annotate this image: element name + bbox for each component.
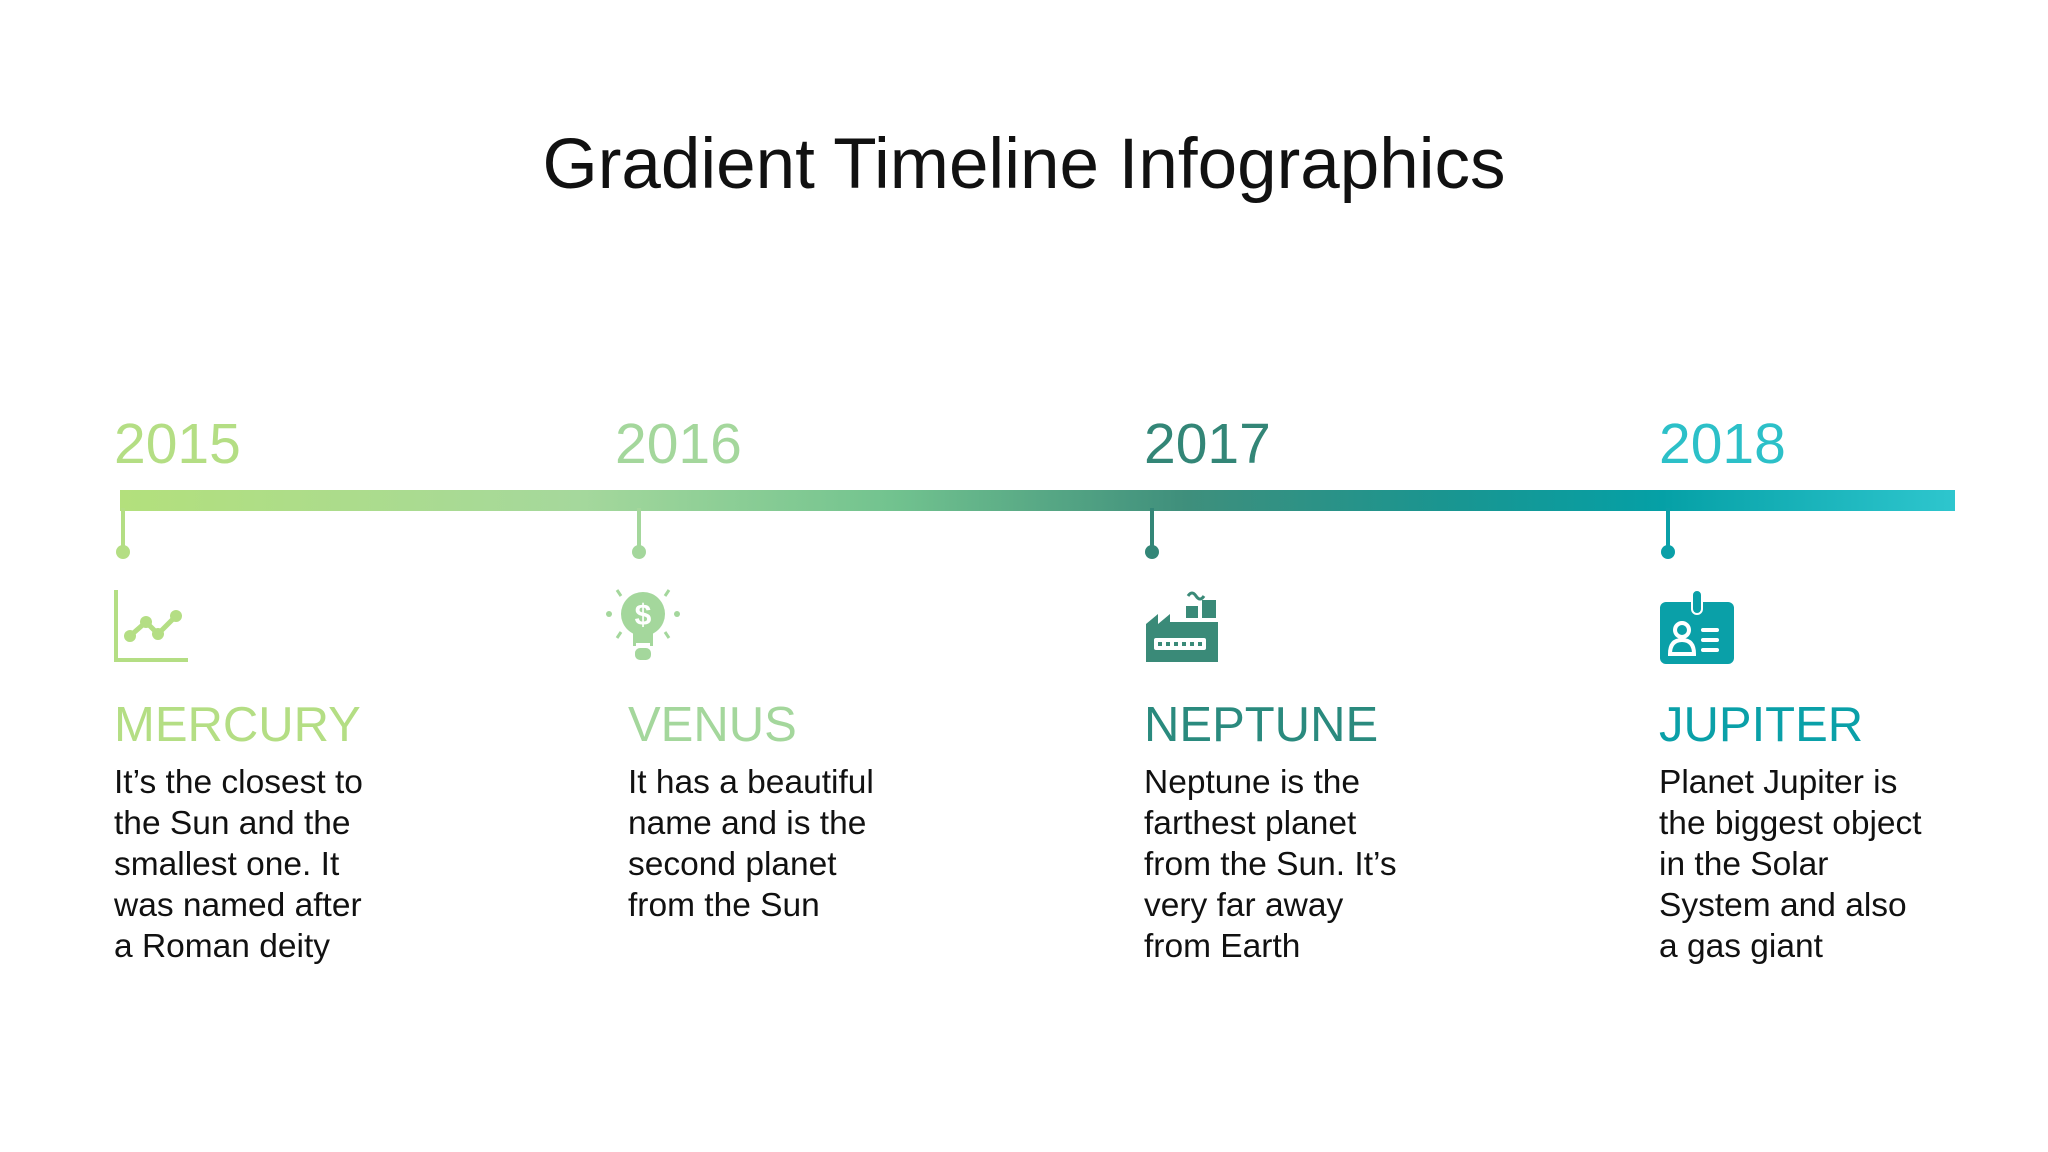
item: 2017 neptune bbox=[1144, 412, 1397, 965]
icon: line chart bbox=[114, 590, 188, 662]
description bbox=[1144, 764, 1397, 965]
name: VENUS bbox=[628, 698, 797, 752]
description: very far away bbox=[1144, 887, 1343, 924]
stem bbox=[1666, 508, 1670, 548]
icon: factory bbox=[1146, 592, 1218, 662]
name: NEPTUNE bbox=[1144, 698, 1378, 752]
item: 2018 jupiter bbox=[1659, 412, 1922, 965]
icon: light bulb dollar: $ bbox=[635, 599, 652, 632]
year 2017: 2017 bbox=[1144, 412, 1271, 476]
description: from the Sun bbox=[628, 887, 820, 924]
description: It has a beautiful bbox=[628, 764, 874, 801]
dot bbox=[1145, 545, 1159, 559]
dot bbox=[632, 545, 646, 559]
description: Planet Jupiter is bbox=[1659, 764, 1897, 801]
description bbox=[628, 764, 874, 924]
item: 2016 venus bbox=[606, 412, 874, 924]
description: smallest one. It bbox=[114, 846, 339, 883]
year 2015: 2015 bbox=[114, 412, 241, 476]
description: from Earth bbox=[1144, 928, 1300, 965]
icon: id badge bbox=[1660, 591, 1734, 664]
year 2016: 2016 bbox=[615, 412, 742, 476]
description: the biggest object bbox=[1659, 805, 1922, 842]
year 2018: 2018 bbox=[1659, 412, 1786, 476]
timeline bar bbox=[120, 490, 1955, 511]
title: Gradient Timeline Infographics bbox=[543, 125, 1505, 204]
stem bbox=[1150, 508, 1154, 548]
description: farthest planet bbox=[1144, 805, 1356, 842]
description: second planet bbox=[628, 846, 837, 883]
dot bbox=[1661, 545, 1675, 559]
description bbox=[1659, 764, 1922, 965]
icon: light bulb dollar bbox=[606, 589, 680, 660]
description: the Sun and the bbox=[114, 805, 351, 842]
description: a Roman deity bbox=[114, 928, 330, 965]
stem bbox=[121, 508, 125, 548]
description: System and also bbox=[1659, 887, 1907, 924]
description: name and is the bbox=[628, 805, 866, 842]
item: 2015 mercury bbox=[114, 412, 363, 965]
name: JUPITER bbox=[1659, 698, 1863, 752]
description: It’s the closest to bbox=[114, 764, 363, 801]
name: MERCURY bbox=[114, 698, 361, 752]
description bbox=[114, 764, 363, 965]
description: Neptune is the bbox=[1144, 764, 1360, 801]
description: in the Solar bbox=[1659, 846, 1828, 883]
description: was named after bbox=[114, 887, 362, 924]
dot bbox=[116, 545, 130, 559]
stem bbox=[637, 508, 641, 548]
description: from the Sun. It’s bbox=[1144, 846, 1397, 883]
description: a gas giant bbox=[1659, 928, 1823, 965]
